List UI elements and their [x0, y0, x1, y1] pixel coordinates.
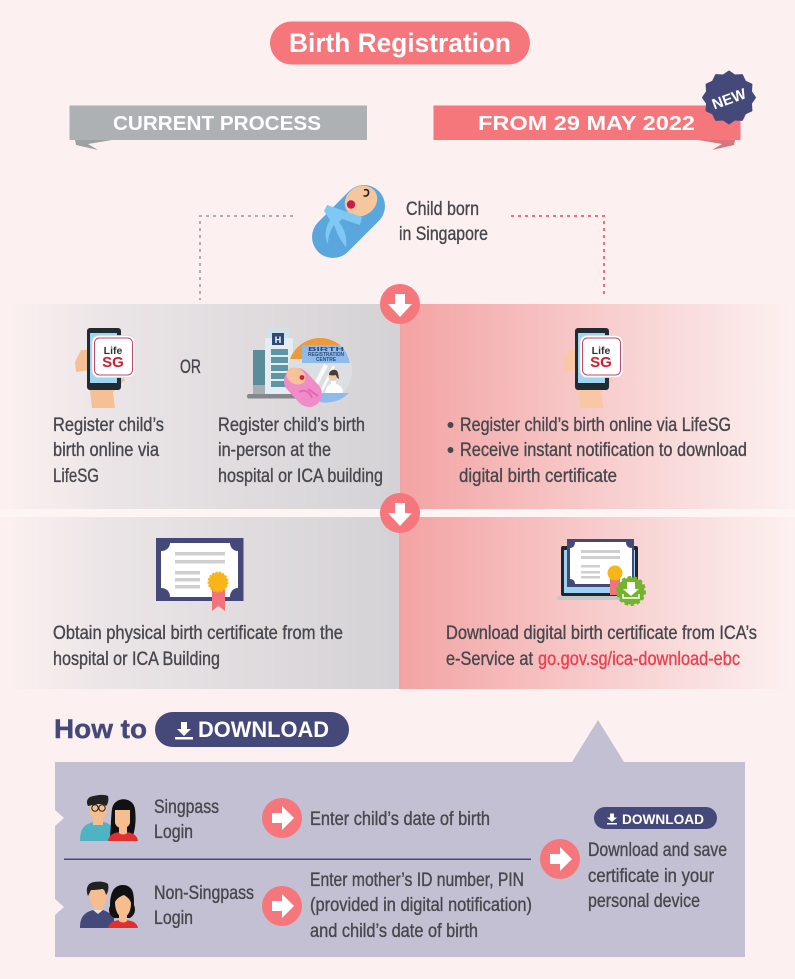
banner: current process: CURRENT PROCESS — [113, 113, 321, 135]
icon: hospital and registration centre: CENTRE — [316, 357, 336, 363]
text: register in person: in-person at the — [218, 440, 331, 461]
button: download: DOWNLOAD — [622, 812, 704, 827]
text: download and save: personal device — [588, 891, 700, 912]
heading: how to download: How to — [54, 714, 147, 744]
icon: hospital and registration centre — [247, 328, 352, 403]
arrow: down to certificate step — [380, 493, 420, 533]
banner: current process — [70, 106, 367, 150]
icon: hospital and registration centre: BIRTH — [308, 347, 344, 353]
arrow: down to registration step — [380, 284, 420, 324]
icon: couple without Singpass — [80, 882, 138, 928]
connector: dotted line to current process — [200, 216, 293, 300]
text: register in person — [218, 415, 383, 487]
text: child born in Singapore: in Singapore — [399, 224, 488, 245]
icon: LifeSG on phone — [563, 328, 623, 408]
heading: how to download — [54, 712, 349, 747]
panel: how to download steps — [55, 720, 745, 957]
icon: LifeSG on phone: SG — [102, 354, 124, 371]
heading: how to download: DOWNLOAD — [198, 717, 329, 742]
text: register in person: hospital or ICA building — [218, 466, 383, 487]
icon: LifeSG on phone — [75, 328, 135, 408]
text: online registration bullets: Register child’s birth online via LifeSG — [460, 415, 731, 436]
text: obtain physical certificate: hospital or ICA Building — [53, 649, 220, 670]
icon: hospital and registration centre: H — [275, 335, 281, 345]
text: Singpass login — [154, 797, 219, 843]
banner: from 29 May 2022 — [434, 106, 740, 150]
icon: LifeSG on phone: SG — [590, 354, 612, 371]
text: child born in Singapore — [399, 199, 488, 245]
text: online registration bullets: digital birth certificate — [459, 466, 617, 487]
text: register online via LifeSG: LifeSG — [53, 466, 99, 487]
arrow: non-Singpass step — [262, 886, 302, 926]
banner: from 29 May 2022: FROM 29 MAY 2022 — [478, 113, 695, 135]
panel: current process registration — [8, 304, 400, 509]
title: Birth Registration — [289, 28, 511, 58]
text: download digital certificate: go.gov.sg/ica-download-ebc — [538, 649, 740, 670]
text: non-Singpass login: Login — [154, 908, 193, 929]
text: enter ID, PIN and date of birth: (provided in digital notification) — [310, 895, 532, 916]
text: Singpass login: Login — [154, 822, 193, 843]
text: enter ID, PIN and date of birth: and child’s date of birth — [310, 921, 478, 942]
text: download and save — [588, 840, 727, 912]
text: enter date of birth: Enter child’s date of birth — [310, 809, 490, 830]
icon: digital certificate on laptop — [557, 539, 644, 604]
text: register online via LifeSG: Register child’s — [53, 415, 164, 436]
icon: certificate — [156, 538, 244, 611]
text: online registration bullets — [448, 415, 747, 487]
arrow: Singpass step — [262, 798, 302, 838]
panel: new process registration — [400, 304, 790, 509]
text: register in person: Register child’s birth — [218, 415, 365, 436]
arrow: to download step — [540, 839, 580, 879]
text: download and save: Download and save — [588, 840, 727, 861]
text: non-Singpass login — [154, 883, 254, 929]
panel: obtain physical certificate — [8, 517, 399, 689]
text: register online via LifeSG: birth online via — [53, 440, 159, 461]
icon: LifeSG on phone: Life — [104, 345, 122, 357]
icon: LifeSG on phone: Life — [592, 345, 610, 357]
button: download — [594, 807, 717, 829]
icon: hospital and registration centre: REGISTRATION — [308, 352, 344, 358]
text: enter ID, PIN and date of birth: Enter mother’s ID number, PIN — [310, 870, 524, 891]
text: download and save: certificate in your — [588, 866, 715, 887]
icon: swaddled baby — [324, 179, 383, 247]
text: register online via LifeSG — [53, 415, 164, 487]
text: obtain physical certificate — [53, 623, 343, 670]
badge: new: NEW — [710, 85, 749, 113]
badge: new — [703, 71, 755, 124]
text: child born in Singapore: Child born — [406, 199, 479, 220]
text: non-Singpass login: Non-Singpass — [154, 883, 254, 904]
title — [270, 22, 530, 64]
text: online registration bullets: Receive instant notification to download — [460, 440, 747, 461]
icon: couple with Singpass — [80, 795, 138, 841]
text: download digital certificate — [446, 623, 757, 670]
panel: download digital certificate — [399, 517, 790, 689]
text: obtain physical certificate: Obtain physical birth certificate from the — [53, 623, 343, 644]
text: Singpass login: Singpass — [154, 797, 219, 818]
text: download digital certificate: e-Service at — [446, 649, 534, 670]
text: enter ID, PIN and date of birth — [310, 870, 532, 942]
label: OR: OR — [180, 357, 201, 378]
connector: dotted line to new process — [511, 216, 604, 298]
